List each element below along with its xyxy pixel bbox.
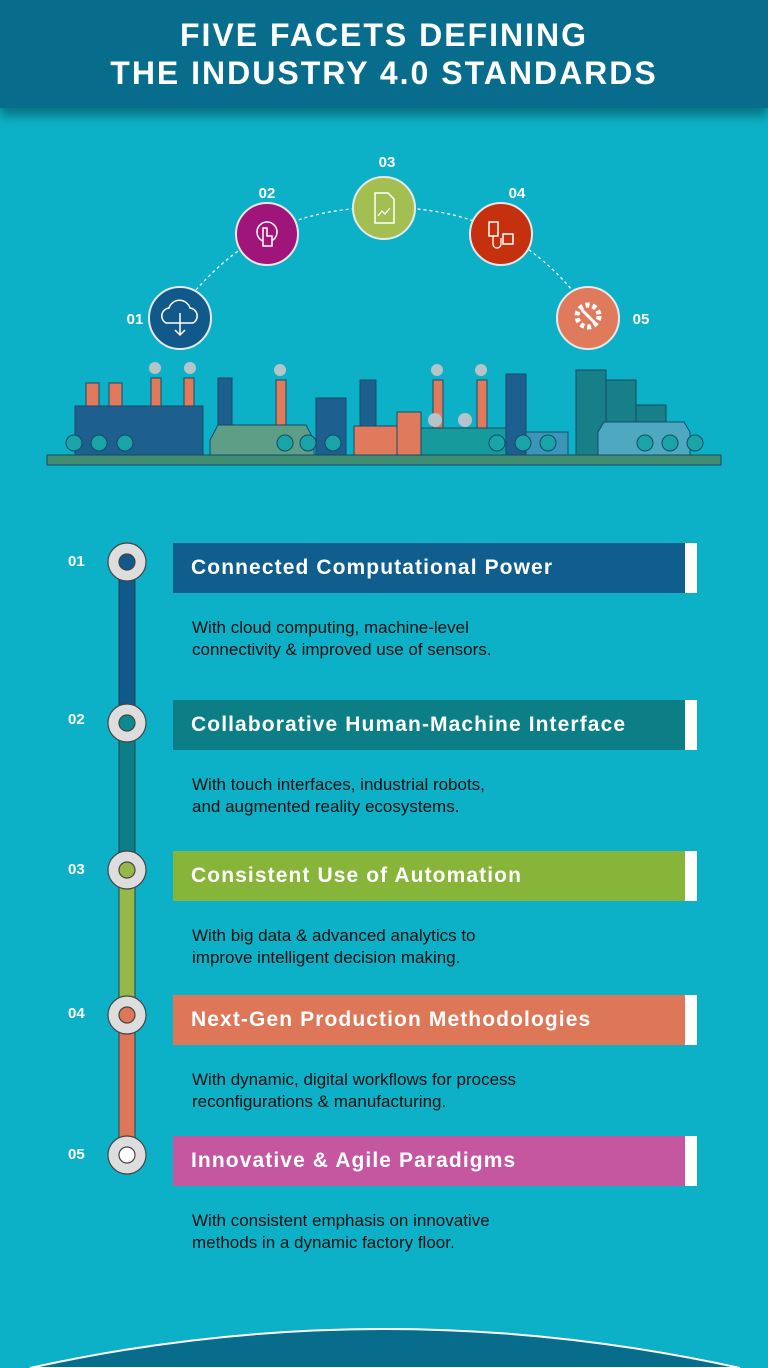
icon 05 <box>557 287 649 349</box>
text: 05 <box>68 1146 85 1163</box>
icon 04 <box>470 185 532 265</box>
text: methods in a dynamic factory floor. <box>192 1233 455 1252</box>
text: Consistent Use of Automation <box>191 864 522 887</box>
text: With consistent emphasis on innovative <box>192 1211 490 1230</box>
item 05 <box>68 1136 697 1252</box>
text: With cloud computing, machine-level <box>192 618 469 637</box>
item 03 <box>68 851 697 967</box>
text: and augmented reality ecosystems. <box>192 797 459 816</box>
timeline line <box>118 580 136 1138</box>
text: Connected Computational Power <box>191 556 553 579</box>
icon 05: 05 <box>633 311 649 328</box>
factory skyline <box>47 370 721 465</box>
item 02 <box>68 700 697 816</box>
text: 01 <box>68 553 85 570</box>
icon 03 <box>353 154 415 239</box>
illustration: icons and factory skyline <box>46 154 722 466</box>
item 04 <box>68 995 697 1111</box>
text: With big data & advanced analytics to <box>192 926 476 945</box>
header <box>0 0 768 108</box>
icon 01: 01 <box>127 311 143 328</box>
text: improve intelligent decision making. <box>192 948 460 967</box>
icon 02 <box>236 185 298 265</box>
text: connectivity & improved use of sensors. <box>192 640 492 659</box>
text: 02 <box>68 711 85 728</box>
icon 01 <box>127 287 211 349</box>
item 01 <box>68 543 697 659</box>
text: 03 <box>68 861 85 878</box>
text: With dynamic, digital workflows for process <box>192 1070 516 1089</box>
text: Innovative & Agile Paradigms <box>191 1149 516 1172</box>
text: 04 <box>68 1005 85 1022</box>
text: Next-Gen Production Methodologies <box>191 1008 591 1031</box>
text: With touch interfaces, industrial robots, <box>192 775 485 794</box>
text: reconfigurations & manufacturing. <box>192 1092 446 1111</box>
icon 04: 04 <box>509 185 526 202</box>
dashed arc <box>196 208 572 290</box>
text: Collaborative Human-Machine Interface <box>191 713 626 736</box>
bottom arc <box>30 1329 740 1368</box>
header: FIVE FACETS DEFINING <box>180 17 588 53</box>
icon 03: 03 <box>379 154 395 171</box>
icon 02: 02 <box>259 185 275 202</box>
header: THE INDUSTRY 4.0 STANDARDS <box>110 55 658 91</box>
